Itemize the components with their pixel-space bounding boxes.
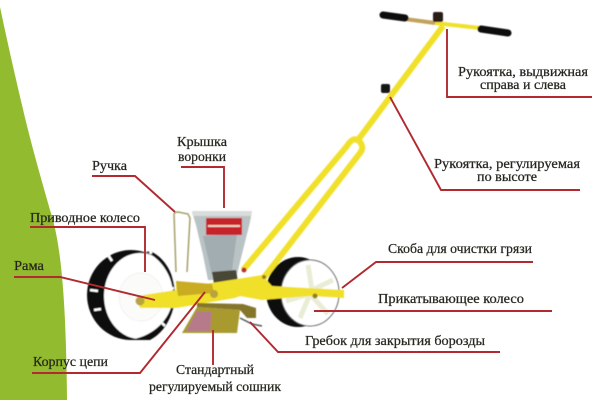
- wire handle: [174, 212, 190, 272]
- callout: height-adjustable handle: Рукоятка, регулируемая: [434, 156, 580, 171]
- callout: height-adjustable handle: по высоте: [477, 169, 537, 184]
- callout: press wheel: Прикатывающее колесо: [378, 291, 524, 306]
- callout: hopper lid: Крышка: [177, 134, 227, 149]
- callout: hopper lid: воронки: [178, 149, 226, 164]
- callout: height-adjustable handle: [390, 97, 580, 190]
- callout: frame: Рама: [14, 258, 44, 273]
- seed hopper: [192, 211, 252, 284]
- callout: frame: [14, 258, 155, 300]
- callout: standard opener: регулируемый сошник: [149, 379, 281, 394]
- callout: adjustable sliding handle: справа и слева: [480, 77, 566, 92]
- callout: drive wheel: [30, 210, 145, 272]
- seeder machine: [87, 12, 508, 340]
- callout: standard opener: [149, 330, 281, 394]
- frame and shafts: [136, 26, 443, 308]
- callout: hopper lid: [177, 134, 227, 208]
- callout: drive wheel: Приводное колесо: [30, 210, 140, 225]
- callout: furrow closer: Гребок для закрытия борозды: [305, 333, 485, 348]
- front drive wheel: [87, 249, 176, 340]
- callout: standard opener: Стандартный: [176, 362, 254, 377]
- callout: adjustable sliding handle: [447, 29, 592, 97]
- callout: furrow closer: [250, 322, 500, 352]
- callout: grip: Ручка: [92, 158, 127, 173]
- callout: scraper: [342, 241, 533, 288]
- rear press wheel: [266, 257, 339, 327]
- T-handle: [381, 12, 508, 93]
- callout: chain housing: [32, 292, 205, 373]
- callout: scraper: Скоба для очистки грязи: [388, 241, 532, 256]
- callout: chain housing: Корпус цепи: [33, 354, 108, 369]
- callout: adjustable sliding handle: Рукоятка, выдвижная: [458, 64, 588, 79]
- furrow opener: [182, 303, 262, 333]
- green background shape: [0, 7, 67, 400]
- callout: grip: [92, 158, 175, 212]
